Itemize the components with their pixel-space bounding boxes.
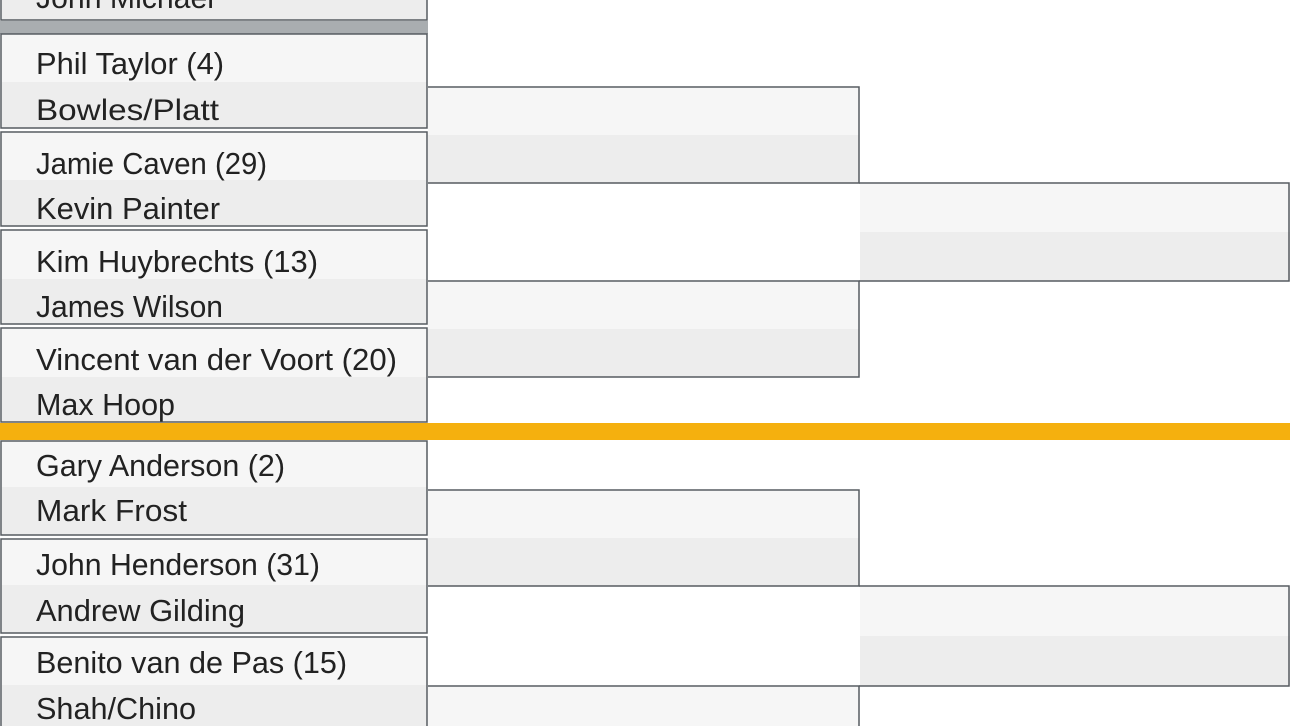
match: Caven vs Painter: Kevin Painter (36, 191, 220, 226)
separator: orange band (0, 423, 1290, 440)
match: John Michael (partial) (1, 0, 427, 20)
match: van de Pas vs Shah/Chino: Benito van de Pas (15) (36, 645, 347, 680)
round 2 empty slot 4 (partial) (428, 686, 859, 726)
match: Caven vs Painter (1, 132, 427, 226)
match: Anderson vs Frost: Gary Anderson (2) (36, 448, 285, 483)
match: Huybrechts vs Wilson: James Wilson (36, 289, 223, 324)
round 3 empty slot 2 (859, 586, 1290, 686)
separator: grey band (0, 21, 428, 34)
match: Henderson vs Gilding: John Henderson (31) (36, 547, 320, 582)
match: Taylor vs Bowles/Platt (1, 34, 427, 128)
match: van de Pas vs Shah/Chino (1, 637, 427, 726)
match: Huybrechts vs Wilson (1, 230, 427, 324)
match: Henderson vs Gilding: Andrew Gilding (36, 593, 245, 628)
round 2 empty slot 2 (428, 281, 859, 377)
match: Caven vs Painter: Jamie Caven (29) (36, 146, 267, 181)
round 2 empty slot 3 (428, 490, 859, 586)
match: Henderson vs Gilding (1, 539, 427, 633)
match: van de Pas vs Shah/Chino: Shah/Chino (36, 691, 196, 726)
match: Anderson vs Frost (1, 441, 427, 535)
match: van der Voort vs Hoop (1, 328, 427, 422)
match: van der Voort vs Hoop: Vincent van der Voort (20) (36, 342, 397, 377)
round 3 empty slot 1 (859, 183, 1290, 281)
match: Anderson vs Frost: Mark Frost (36, 493, 187, 528)
match: Taylor vs Bowles/Platt: Bowles/Platt (36, 94, 220, 127)
match: Taylor vs Bowles/Platt: Phil Taylor (4) (36, 46, 224, 81)
round 2 empty slot 1 (428, 87, 859, 183)
match: Huybrechts vs Wilson: Kim Huybrechts (13) (36, 244, 318, 279)
match: van der Voort vs Hoop: Max Hoop (36, 387, 175, 422)
